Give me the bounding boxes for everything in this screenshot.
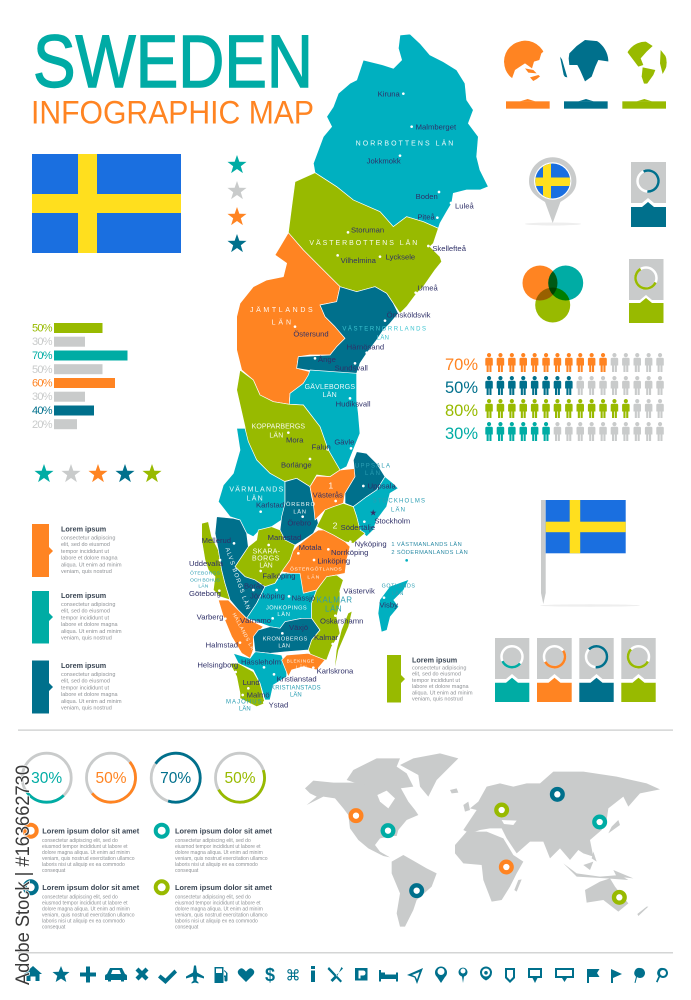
region: Vasterbotten [288,173,442,313]
map labels: south: ÖSTERGÖTLANDS [290,566,342,573]
map marker: dark russia [552,789,563,800]
map labels: south: LÄN [323,391,337,399]
map labels: north: Storuman [351,225,384,234]
map labels: south: LÄN [392,590,403,597]
map labels: north: Vilhelmina [341,256,377,265]
text block: orange: veniam, quis nostrud exercitation ullamco [42,856,135,862]
icon: navigation arrow [407,968,423,984]
map labels: south: Varberg [197,612,223,621]
region: Kronoberg [253,618,320,653]
icon: target pin [480,966,492,980]
callout: teal lorem ipsum: consectetur adipiscing [61,602,115,608]
map labels: south: Karlskrona [317,666,354,675]
map labels: south: Kristianstad [277,675,317,684]
callout: green lorem ipsum: consectetur adipiscing [412,666,466,672]
region: Kristianstad [233,652,287,700]
map labels: north: Örnsköldsvik [387,311,431,320]
callout: green lorem ipsum [387,655,473,702]
callout: orange lorem ipsum: consectetur adipiscing [61,536,115,542]
map labels: south: Norrköping [331,548,368,557]
map labels: south: KALMAR [317,595,352,604]
map marker: green [496,805,507,815]
region: Oland [335,612,352,667]
callout: orange lorem ipsum: tempor incididunt ut [61,549,109,555]
ring: 30%: 30% [31,770,62,787]
map labels: south: Uddevalla [189,559,224,568]
row: 70% [445,353,664,374]
row: 30%: 30% [445,425,478,443]
map labels: north: LÄN [272,319,291,327]
map labels: south: LÄN [391,506,405,513]
map labels: south: Hudiksvall [336,400,371,409]
callout: dark lorem ipsum: veniam, quis nostrud [61,706,112,712]
icon: pennant [611,969,622,983]
icon: cutlery [328,967,343,982]
callout: green lorem ipsum: tempor incididunt ut [412,678,460,684]
text block: dark: veniam, quis nostrud exercitation ullamco [42,912,135,918]
pictogram chart [445,353,664,443]
map labels: south: LÄN [307,573,320,580]
map labels: south [189,383,468,713]
map labels: south: SKARA- [253,549,281,556]
map labels: north: Umeå [417,284,438,293]
map labels: south: MAJÖHUS [226,699,262,706]
callout: orange lorem ipsum: veniam, quis nostrud [61,569,112,575]
globes [503,40,667,109]
map labels: south: Västervik [343,586,375,595]
map labels: south: Hässleholm [241,658,281,667]
icon: plus [80,966,96,982]
icon: dollar: $ [265,965,275,985]
map labels: south: ÖTEBORGS [190,570,221,577]
title: INFOGRAPHIC MAP [31,94,314,130]
map labels: south: LÄN [278,642,290,649]
icon: speech bubble [528,968,542,983]
map labels: south: 2 SÖDERMANLANDS LÄN [391,549,468,556]
map labels: south: LÄN [296,663,307,669]
callout: orange lorem ipsum: elit, sed do eiusmod [61,542,110,548]
icon: map tag [505,968,515,983]
flag on pole [540,500,640,607]
map labels: south: JÖNKÖPINGS [266,604,307,611]
icon: star solid [52,966,70,982]
gauge: orange [537,638,572,702]
bar chart: 60% [32,378,53,390]
callout: green lorem ipsum: Lorem ipsum [412,656,457,664]
text block: dark: eiusmod tempor incididunt ut labore et [42,900,128,906]
map labels: south: Södertälje [341,523,375,532]
region: Jonkoping [247,573,317,628]
map marker: orange [351,810,361,821]
bar chart: 20% [32,419,53,431]
globe: green [622,40,667,109]
icon: command: ⌘ [286,966,300,984]
callout: teal lorem ipsum: Lorem ipsum [61,591,106,600]
venn diagram [522,266,583,322]
map labels: south: Jönköping [250,592,285,601]
map labels: south: Växjö [289,623,308,632]
map labels: south: Värnamo [240,616,271,625]
gauge: dark top [631,162,666,227]
map marker: orange east africa [501,862,512,872]
map marker: teal [383,825,393,836]
globe: orange [503,40,550,109]
map labels: north: Östersund [293,329,329,338]
gauge: green [621,638,656,702]
text block: dark [25,881,140,930]
map labels: north: Jokkmokk [367,157,401,166]
text block: teal: laboris nisi ut aliquip ex ea commodo [175,862,258,868]
title: SWEDEN [33,20,313,103]
ring: 50%: 50% [95,770,127,787]
icon: info [311,966,315,982]
text block: green: Lorem ipsum dolor sit amet [175,883,272,892]
map labels: north: VÄSTERNORRLANDS [342,326,426,333]
text block: teal: veniam, quis nostrud exercitation ullamco [175,856,268,862]
icon: check [158,970,177,984]
map labels: south: LÄN [198,582,209,589]
map labels: north: Lycksele [386,252,415,261]
region: Uppsala [345,452,385,507]
map labels: south: LÄN [277,611,290,618]
map labels: north: Malmberget [416,122,457,131]
map marker: teal korea [594,817,605,827]
map labels: south: STOCKHOLMS [373,499,425,505]
gauge: dark [579,638,614,702]
map labels: south: Karlstad [256,501,284,510]
map labels: south: Uppsala [368,481,396,490]
map labels: north: NORRBOTTENS LÄN [356,139,453,147]
map labels: south: ★ [369,508,377,518]
stars row [34,464,162,482]
icon row [24,965,668,985]
text block: dark: consectetur adipiscing elit, sed do [42,894,118,900]
bar chart: 70% [32,350,53,362]
map: Sweden counties [202,34,488,707]
map labels: south: ALVS BORGS LÄN [223,547,251,610]
map labels: south: Nässjö [292,594,315,603]
text block: green: eiusmod tempor incididunt ut labore et [175,900,261,906]
map labels: north: Piteå [417,213,436,222]
map labels: south: Göteborg [189,589,221,598]
icon: pin thin [458,968,468,983]
map labels: south: GOTLANDS [382,584,415,590]
ring: 70%: 70% [160,770,191,787]
region: Norrbotten [313,34,488,228]
text block: green: dolore magna aliqua. Ut enim ad minim [175,906,263,912]
row: 80% [445,399,664,420]
map labels: south: LÄN [269,431,283,439]
region: Jamtland [237,233,345,404]
map marker: green australia [614,892,625,903]
map labels: south: Halmstad [206,640,238,649]
row: 50% [445,376,664,397]
region: Skaraborg [235,527,295,587]
map labels: north: Sundsvall [335,364,368,373]
text block: green [156,881,272,930]
callout: dark lorem ipsum: consectetur adipiscing [61,672,115,678]
map labels: north: Boden [416,192,438,201]
callout: teal lorem ipsum: aliqua. Ut enim ad minim [61,629,122,635]
region: Gotland [378,580,408,632]
bar chart: 40% [32,405,53,417]
callout: green lorem ipsum: elit, sed do eiusmod [412,672,461,678]
map labels: south: LÄN [365,470,380,477]
map labels: south: BLEKINGE [287,659,314,664]
text block: orange: consequat [42,868,66,874]
text block: orange: laboris nisi ut aliquip ex ea commodo [42,862,125,868]
icon: parking [355,968,368,980]
map labels: north: JÄMTLANDS [250,306,313,314]
map labels: south: Stockholm [374,516,410,525]
text block: teal: consectetur adipiscing elit, sed do [175,838,251,844]
callout: dark lorem ipsum [32,660,122,714]
text block: orange: consectetur adipiscing elit, sed do [42,838,118,844]
icon: home [24,966,42,981]
ring: 70% [142,744,210,812]
map labels: south: Mariestad [268,533,301,542]
text block: orange: dolore magna aliqua. Ut enim ad minim [42,850,130,856]
map labels: south: KOPPARBERGS [252,423,305,430]
map labels: south: Oskarshamn [320,616,363,625]
stars column [227,155,247,252]
ring: 30% [12,743,81,812]
map labels: south: Visby [379,600,398,609]
callout: orange lorem ipsum: Lorem ipsum [61,524,106,534]
region: Goteborg och Bohus [202,522,230,600]
ring: 50% green [209,747,271,809]
map labels: north: Härnösand [347,342,384,351]
bar chart: 50% [32,364,53,376]
map labels: south: ÖREBRO [286,501,316,508]
callout: green lorem ipsum: labore et dolore magna [412,684,470,690]
region: Alvsborg [215,517,265,618]
region: Vasternorrland [297,287,398,373]
map labels: south: Örebro [287,518,311,527]
text block: dark: laboris nisi ut aliquip ex ea commodo [42,918,125,924]
icon: wide speech bubble [555,968,574,982]
callout: teal lorem ipsum: labore et dolore magna [61,622,119,628]
map labels: south: LÄN [325,605,342,614]
region: Orebro [280,478,318,545]
map labels: south: KRONOBERGS [263,636,308,642]
text block: orange: eiusmod tempor incididunt ut labore et [42,844,128,850]
map labels: north: Luleå [455,201,474,210]
map labels: north [250,89,474,373]
icon: bed [379,970,398,982]
text block: teal: dolore magna aliqua. Ut enim ad minim [175,850,263,856]
bar chart: 30% [32,336,53,348]
icon: flag location pin [525,157,581,226]
continents [305,753,660,927]
region: Halland [218,600,263,658]
map labels: south: Falun [312,442,331,451]
map labels: south: LÄN [259,562,273,570]
callout: teal lorem ipsum [32,591,122,644]
callout: dark lorem ipsum: tempor incididunt ut [61,685,109,691]
map labels: south: 1 VÄSTMANLANDS LÄN [391,541,462,548]
map labels: north: LÄN [377,334,389,341]
map labels: south: Falköping [262,572,296,581]
icon: fuel [214,967,228,983]
flag: Sweden rectangle [32,154,181,253]
watermark: vertical stock text: Adobe Stock | #163662730 [12,765,34,985]
region: Blekinge [282,653,325,677]
map labels: south: Lund [243,678,260,687]
map labels: north: Kiruna [378,89,401,98]
map labels: south: Helsingborg [197,660,238,669]
text block: dark: Lorem ipsum dolor sit amet [42,883,140,892]
text block: teal: consequat [175,868,199,874]
text block: green: laboris nisi ut aliquip ex ea commodo [175,918,258,924]
map labels: south: HALLANDS LÄN [231,612,258,655]
map labels: south: Gävle [334,438,354,447]
region: Kopparberg [237,370,340,487]
text block: orange: Lorem ipsum dolor sit amet [42,826,140,836]
world map [305,753,660,927]
ring: 50% [76,743,146,812]
callout: dark lorem ipsum: Lorem ipsum [61,661,106,670]
icon: car [105,968,127,982]
region: Kalmar [308,575,343,660]
icon: cross [136,968,148,980]
map labels: south: UPPSALA [355,463,390,469]
callout: orange lorem ipsum [32,524,122,577]
map labels: south: Ystad [269,700,288,709]
callout: teal lorem ipsum: elit, sed do eiusmod [61,609,110,615]
map labels: north: VÄSTERBOTTENS LÄN [309,239,417,247]
map labels: south: Västerås [313,491,343,500]
map labels: south: BORGS [252,555,280,562]
row: 50%: 50% [445,379,478,397]
callout: teal lorem ipsum: veniam, quis nostrud [61,636,112,642]
icon: solid round pin [634,968,645,983]
text block: teal: eiusmod tempor incididunt ut labore et [175,844,261,850]
map marker: dark [411,885,422,896]
region: Stockholm [353,477,398,537]
text block: orange [25,825,140,874]
row: 70%: 70% [445,356,478,374]
icon: magnifier pin [656,968,668,982]
map labels: south: Nyköping [355,539,387,548]
map labels: south: Kalmar [314,633,339,642]
region: Vastmanland [310,468,357,520]
text block: green: consequat [175,924,199,930]
map labels: south: LÄN [293,508,306,515]
map labels: south: KRISTIANSTADS [271,685,321,691]
bar chart [32,322,128,431]
map labels: south: LÄN [290,692,302,699]
gauge: green top [629,259,664,323]
callout: dark lorem ipsum: labore et dolore magna [61,692,119,698]
map labels: south: OCH BOHUS [190,577,221,583]
region: Ostergotland [282,530,350,593]
map labels: south: Motala [299,543,322,552]
map labels: north: Skellefteå [432,244,467,253]
map labels: south: Mellerud [202,536,231,545]
text block: dark: consequat [42,924,66,930]
row: 30% [445,422,664,443]
region: Gavleborg [289,370,360,470]
callout: teal lorem ipsum: tempor incididunt ut [61,615,109,621]
row: 80%: 80% [445,402,478,420]
text block: teal [156,825,272,874]
region: Varmland [218,428,285,537]
gauge: teal [495,638,529,702]
region: Sodermanland [317,503,365,543]
callout: green lorem ipsum: aliqua. Ut enim ad minim [412,690,473,696]
map labels: south: VÄRMLANDS [229,486,284,494]
region: Malmohus [230,663,265,707]
map labels: south: 2 [333,520,338,530]
map labels: south: Borlänge [281,460,312,469]
map labels: south: LÄN [239,706,251,713]
globe: dark [560,40,610,109]
bar chart: 50% [32,322,53,334]
map labels: south: Mora [286,436,304,445]
callout: dark lorem ipsum: elit, sed do eiusmod [61,679,110,685]
icon: plane [186,966,204,984]
map labels: south: Borås [244,582,264,591]
text block: green: consectetur adipiscing elit, sed do [175,894,251,900]
icon: heart [238,968,254,982]
icon: pin outline [435,967,447,983]
map labels: south: 1 [328,480,333,490]
bar chart: 30% [32,391,53,403]
gauge tiles [495,638,656,702]
text block: green: veniam, quis nostrud exercitation ullamco [175,912,268,918]
map labels: south: Linköping [317,556,350,565]
map labels: south: GÄVLEBORGS [305,383,355,391]
progress rings [12,743,271,812]
callout: dark lorem ipsum: aliqua. Ut enim ad minim [61,699,122,705]
callout: orange lorem ipsum: labore et dolore magna [61,556,119,562]
map labels: south: LÄN [247,495,263,503]
icon: flag solid [587,969,600,983]
map labels: south: Malmö [247,690,270,699]
text block: dark: dolore magna aliqua. Ut enim ad minim [42,906,130,912]
callout: orange lorem ipsum: aliqua. Ut enim ad minim [61,562,122,568]
title [31,20,314,130]
text block: teal: Lorem ipsum dolor sit amet [175,826,272,836]
callout: green lorem ipsum: veniam, quis nostrud [412,696,463,702]
ring: 50% green: 50% [224,770,256,787]
map labels: north: Ånge [318,355,336,364]
